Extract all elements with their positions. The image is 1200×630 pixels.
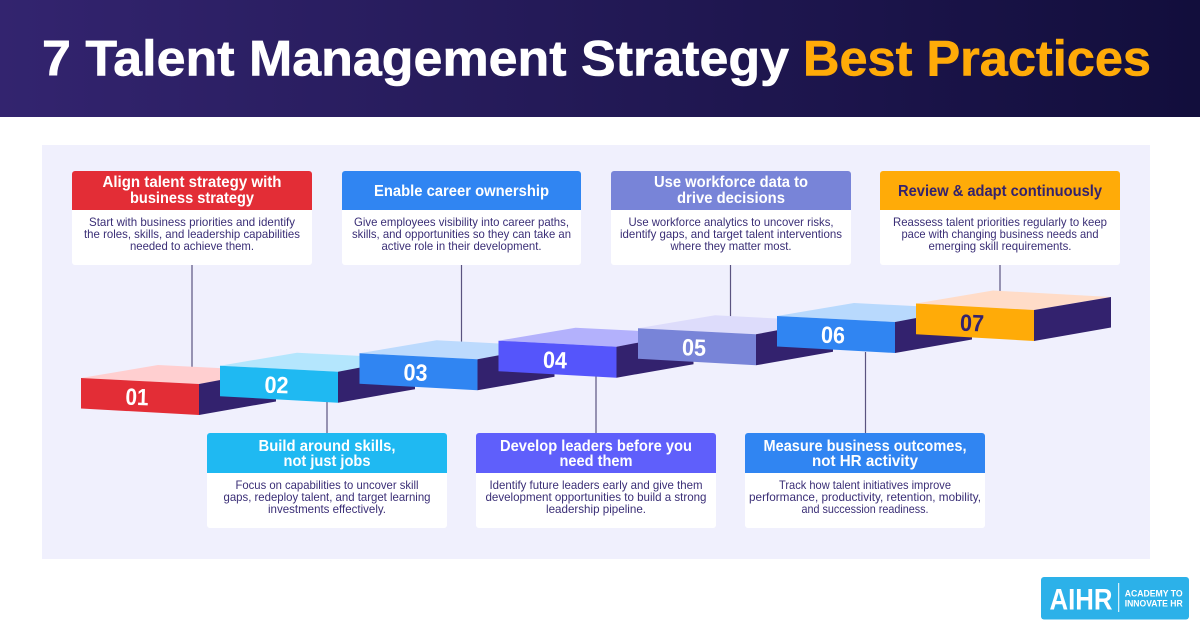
step 06: 06 xyxy=(821,322,845,348)
card 5: workforce data xyxy=(611,171,851,265)
step 04 xyxy=(498,328,694,378)
card 3: career ownership: Give employees visibility into career paths, xyxy=(354,215,569,229)
title highlight: Best Practices xyxy=(803,30,1151,86)
card 2: skills xyxy=(207,433,447,528)
step 03 xyxy=(360,340,554,390)
card 3: career ownership: Enable career ownership xyxy=(374,183,549,200)
card 6: outcomes: not HR activity xyxy=(812,453,918,470)
title: 7 Talent Management Strategy xyxy=(42,30,789,86)
step 05: 05 xyxy=(682,334,706,361)
card 1: align: needed to achieve them. xyxy=(130,239,254,253)
card 4: leaders xyxy=(476,433,716,528)
step 02 xyxy=(220,353,415,403)
step 05 xyxy=(638,315,833,365)
card 4: leaders: need them xyxy=(560,453,632,470)
card 5: workforce data: Use workforce data to xyxy=(654,174,808,191)
card 7: review xyxy=(880,171,1120,265)
step 02: 02 xyxy=(264,372,289,398)
step 04: 04 xyxy=(543,347,567,373)
card 2: skills: not just jobs xyxy=(284,453,370,470)
card 1: align: the roles, skills, and leadership capabilities xyxy=(84,227,300,241)
logo: AIHR: AIHR xyxy=(1050,584,1113,616)
card 1: align: business strategy xyxy=(130,190,254,207)
card 6: outcomes xyxy=(745,433,985,528)
step 01 xyxy=(81,365,276,415)
card 5: workforce data: where they matter most. xyxy=(670,239,792,253)
card 3: career ownership xyxy=(342,171,581,265)
card 4: leaders: leadership pipeline. xyxy=(546,502,646,516)
panel: background xyxy=(42,145,1150,559)
card 6: outcomes: and succession readiness. xyxy=(802,502,928,516)
card 1: align: Align talent strategy with xyxy=(102,174,282,191)
staircase xyxy=(81,290,1111,415)
step 07: 07 xyxy=(960,310,984,336)
card 4: leaders: Develop leaders before you xyxy=(500,438,692,455)
step 06 xyxy=(777,303,972,353)
card 6: outcomes: Measure business outcomes, xyxy=(764,438,966,455)
card 5: workforce data: Use workforce analytics to uncover risks, xyxy=(628,215,834,229)
connector lines xyxy=(192,265,1000,433)
card 3: career ownership: active role in their development. xyxy=(382,239,542,253)
logo: AIHR: INNOVATE HR xyxy=(1125,599,1183,609)
card 3: career ownership: skills, and opportunities so they can take an xyxy=(352,227,571,241)
logo: AIHR xyxy=(1041,577,1189,620)
card 2: skills: gaps, redeploy talent, and target learning xyxy=(224,490,430,504)
step 03: 03 xyxy=(403,359,428,386)
card 5: workforce data: identify gaps, and target talent interventions xyxy=(620,227,842,241)
card 2: skills: Focus on capabilities to uncover skill xyxy=(236,478,418,492)
card 2: skills: Build around skills, xyxy=(258,438,396,455)
card 2: skills: investments effectively. xyxy=(268,502,386,516)
step 01: 01 xyxy=(125,384,149,410)
card 7: review: pace with changing business needs and xyxy=(902,227,1098,241)
card 1: align: Start with business priorities and identify xyxy=(89,215,295,229)
card 1: align xyxy=(72,171,312,265)
header banner xyxy=(0,0,1200,117)
logo: AIHR: ACADEMY TO xyxy=(1125,589,1183,599)
step 07 xyxy=(916,290,1111,341)
card 4: leaders: development opportunities to build a strong xyxy=(486,490,706,504)
card 6: outcomes: Track how talent initiatives improve xyxy=(779,478,951,492)
card 6: outcomes: performance, productivity, retention, mobility, xyxy=(749,490,981,504)
card 7: review: emerging skill requirements. xyxy=(928,239,1072,253)
card 4: leaders: Identify future leaders early and give them xyxy=(490,478,703,492)
card 7: review: Review & adapt continuously xyxy=(898,183,1102,200)
card 5: workforce data: drive decisions xyxy=(677,190,785,207)
card 7: review: Reassess talent priorities regularly to keep xyxy=(893,215,1107,229)
